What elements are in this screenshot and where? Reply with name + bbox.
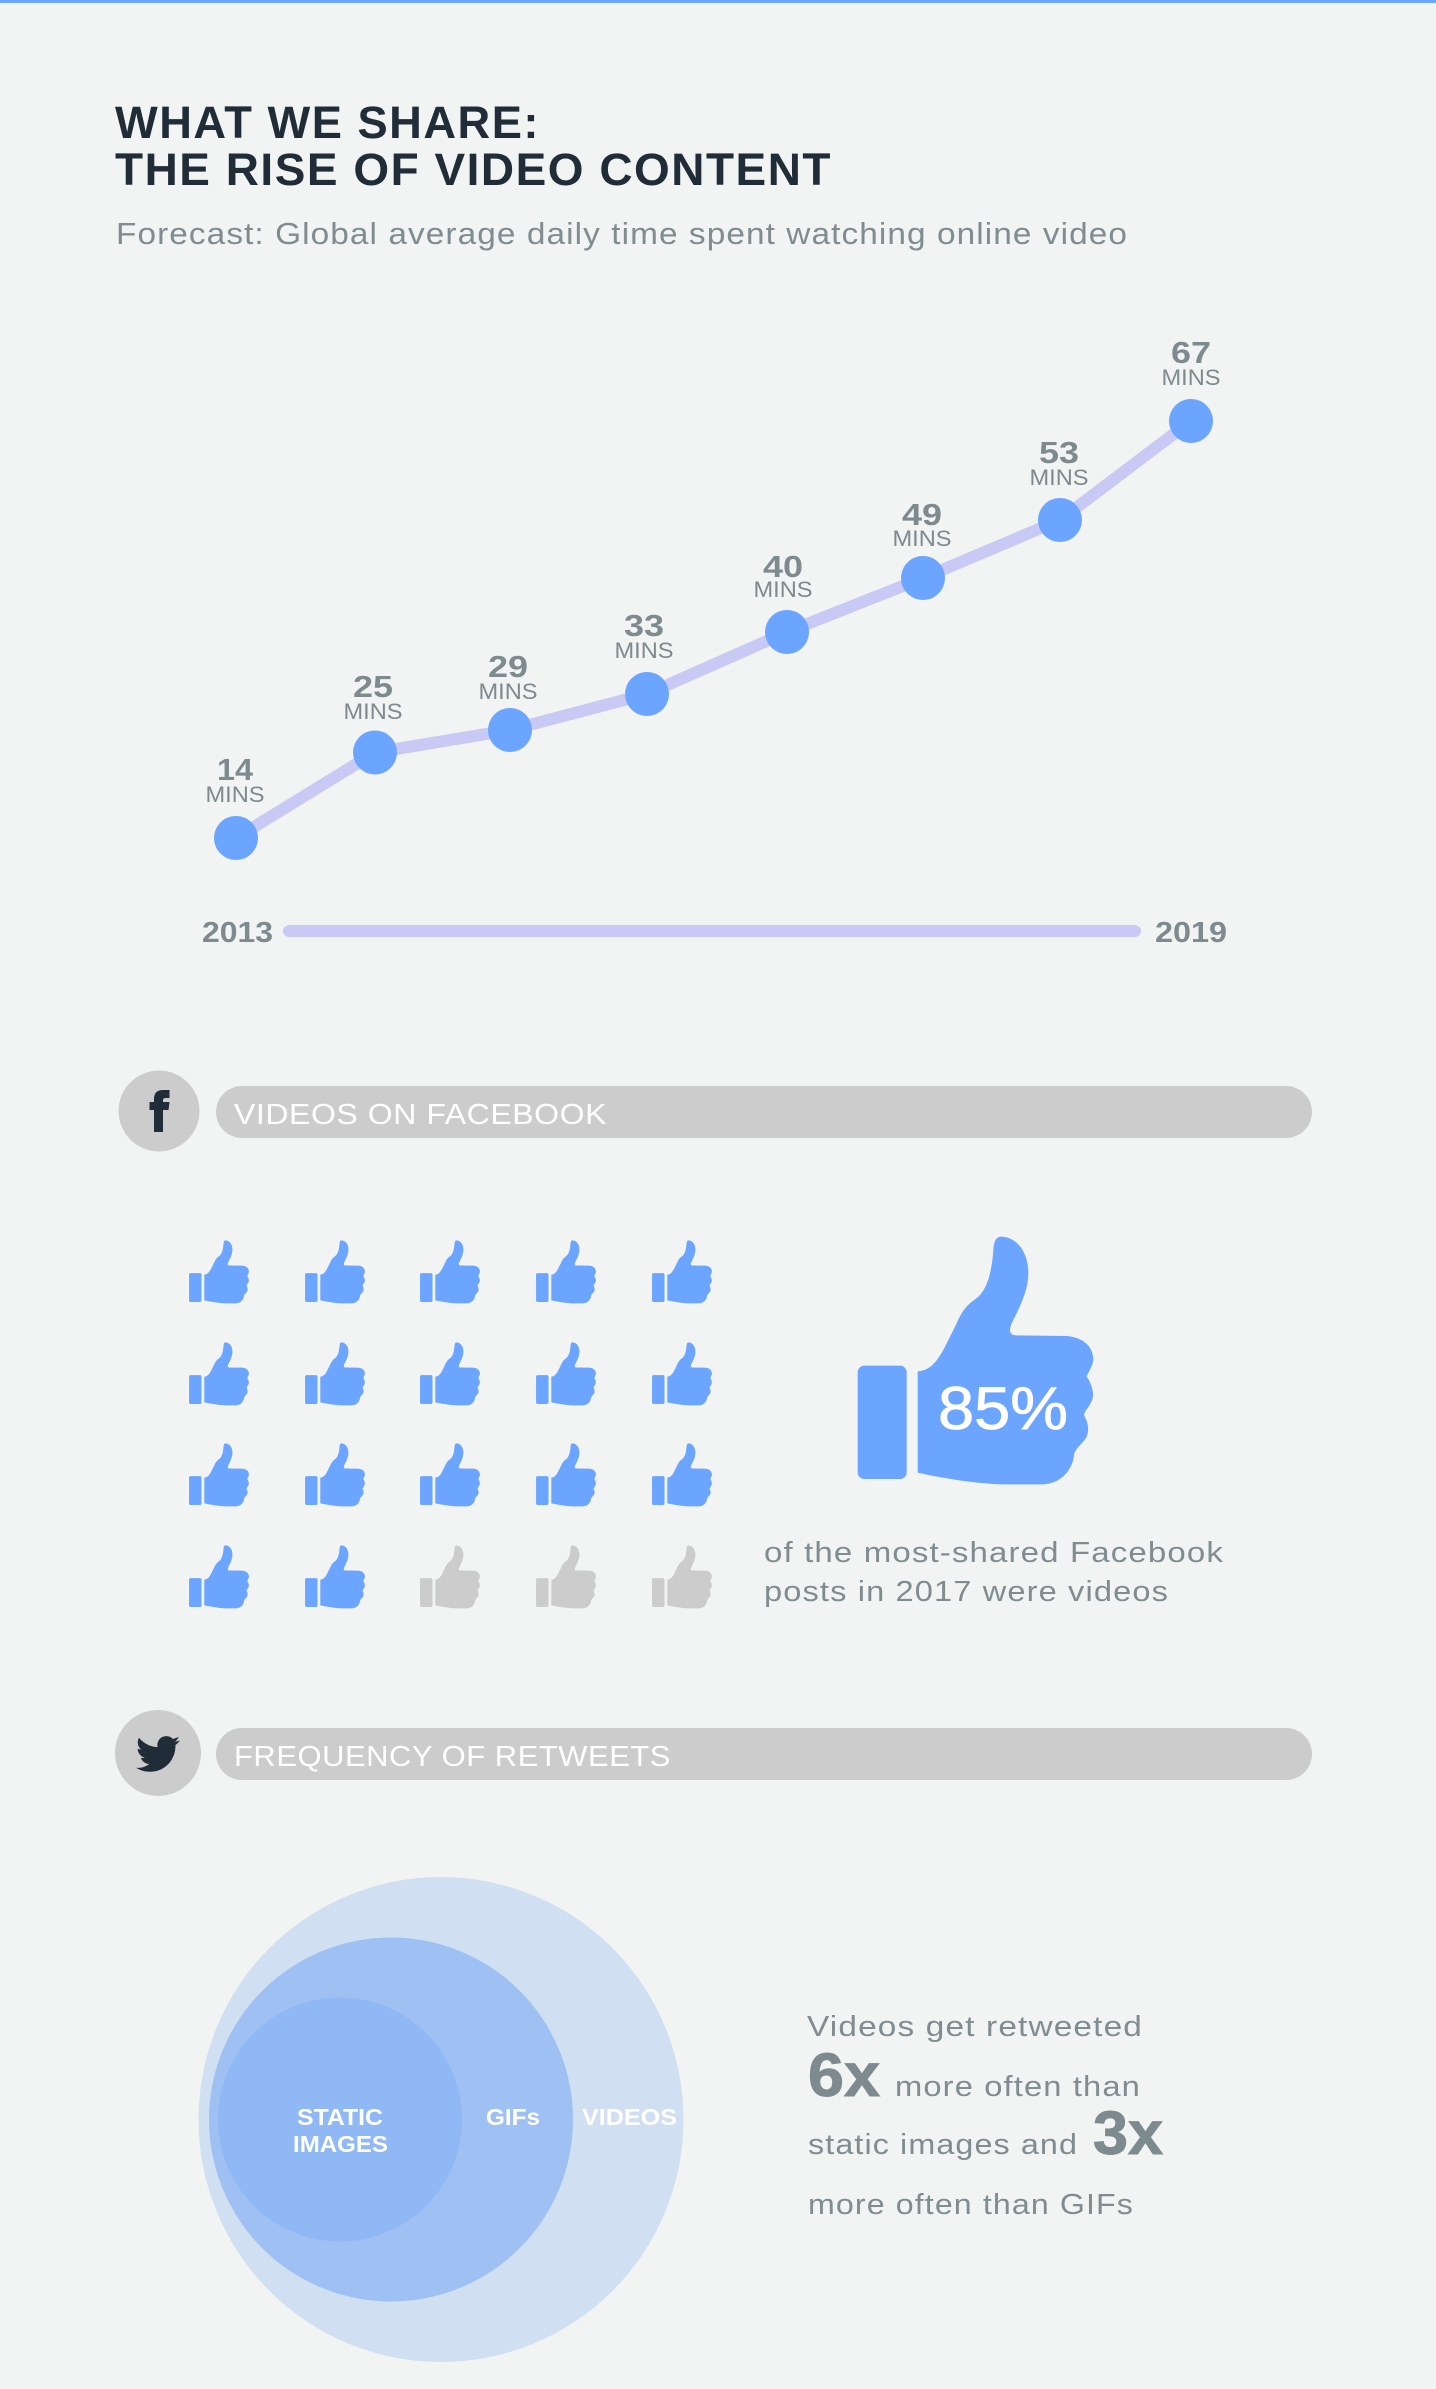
row 2 [189, 1342, 712, 1405]
icon: large thumbs up with 85% [858, 1237, 1093, 1484]
row 4 [189, 1545, 712, 1608]
data labels: 40 [763, 549, 803, 584]
data labels: 49 [902, 497, 942, 532]
time axis: 2019 [1155, 917, 1227, 949]
circle: videos [198, 1877, 684, 2362]
line chart: daily video minutes 2013 to 2019 [202, 335, 1227, 949]
time axis [202, 917, 1227, 949]
text: retweet statistic: 3x [1093, 2099, 1163, 2167]
data labels: MINS [754, 577, 812, 602]
row 3 [189, 1443, 712, 1506]
title: THE RISE OF VIDEO CONTENT [115, 144, 832, 195]
heading pill: VIDEOS ON FACEBOOK [234, 1099, 607, 1131]
data labels: MINS [892, 526, 952, 551]
circle: GIFs [209, 1938, 573, 2302]
text: retweet statistic: more often than [895, 2071, 1141, 2103]
section header: videos on Facebook [118, 1070, 1312, 1152]
icon: Facebook [118, 1070, 200, 1152]
section header: frequency of retweets [115, 1710, 1312, 1796]
data labels: 53 [1039, 435, 1079, 470]
text: retweet statistic: 6x [808, 2041, 880, 2109]
data labels: MINS [1162, 365, 1220, 390]
icon: large thumbs up with 85%: 85% [938, 1375, 1068, 1442]
thumbs-up pictogram: 17 of 20 blue [189, 1240, 712, 1608]
data labels: 25 [353, 669, 393, 704]
circle: static images [218, 1998, 462, 2242]
data labels: 29 [488, 649, 528, 684]
data labels: MINS [478, 679, 538, 704]
row 1 [189, 1240, 712, 1303]
nested circles: retweet frequency [198, 1877, 684, 2362]
circle labels [293, 2104, 677, 2157]
trend line [236, 421, 1191, 838]
data labels: MINS [1030, 465, 1088, 490]
data labels: MINS [344, 699, 402, 724]
text: Facebook statistic: posts in 2017 were videos [764, 1576, 1169, 1608]
heading pill [216, 1086, 1312, 1138]
subtitle: Forecast: Global average daily time spent watching online video [116, 216, 1128, 251]
title [115, 97, 832, 195]
circle labels: GIFs [486, 2104, 540, 2130]
circle labels: IMAGES [293, 2131, 388, 2157]
circle labels: VIDEOS [582, 2104, 677, 2130]
text: retweet statistic: more often than GIFs [808, 2189, 1134, 2221]
heading pill [216, 1728, 1312, 1780]
data labels: 14 [217, 752, 254, 787]
data labels: MINS [206, 782, 264, 807]
icon: Twitter [115, 1710, 201, 1796]
title: WHAT WE SHARE: [115, 97, 540, 148]
text: retweet statistic: static images and [808, 2129, 1078, 2161]
heading pill: FREQUENCY OF RETWEETS [234, 1741, 671, 1773]
data labels: 67 [1171, 335, 1211, 370]
circle labels: STATIC [297, 2104, 383, 2130]
time axis: 2013 [202, 917, 273, 949]
text: retweet statistic: Videos get retweeted [807, 2011, 1143, 2043]
data labels: 33 [624, 608, 664, 643]
text: Facebook statistic [764, 1537, 1224, 1608]
data labels [206, 335, 1220, 807]
text: retweet statistic [807, 2011, 1163, 2221]
data labels: MINS [614, 638, 674, 663]
data points [214, 399, 1213, 860]
text: Facebook statistic: of the most-shared Facebook [764, 1537, 1224, 1569]
